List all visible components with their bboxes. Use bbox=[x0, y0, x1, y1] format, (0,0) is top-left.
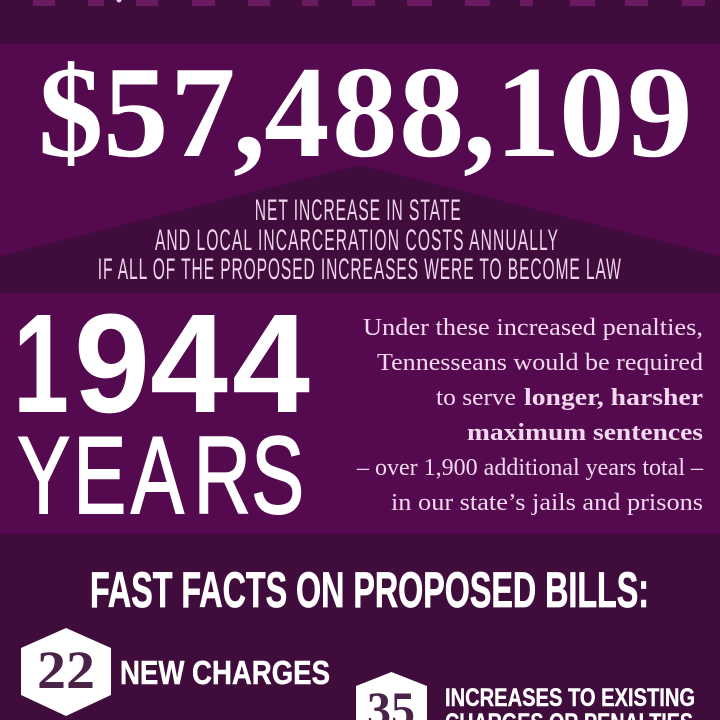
penalties explanation: longer, harsher bbox=[524, 385, 703, 411]
penalties explanation: – over 1,900 additional years total – bbox=[356, 455, 704, 481]
years label: YEARS bbox=[17, 414, 304, 537]
penalties explanation: Tennesseans would be required bbox=[377, 350, 703, 376]
panel: fast facts bbox=[21, 562, 695, 720]
1944 figure: 9 bbox=[74, 284, 150, 442]
hexagon badge 35 bbox=[356, 672, 427, 720]
penalties explanation: to serve bbox=[436, 385, 516, 411]
number 22: 22 bbox=[37, 640, 95, 700]
penalties explanation: in our state’s jails and prisons bbox=[391, 490, 703, 516]
fact: new charges bbox=[21, 628, 330, 716]
cost description bbox=[98, 194, 621, 287]
panel: additional years bbox=[0, 284, 720, 537]
penalties explanation: maximum sentences bbox=[467, 420, 703, 446]
new charges label: NEW CHARGES bbox=[120, 654, 330, 691]
dollar figure: $57,488,109 bbox=[38, 40, 692, 185]
cost description: IF ALL OF THE PROPOSED INCREASES WERE TO BECOME LAW bbox=[98, 253, 621, 287]
fact: increases bbox=[356, 672, 695, 720]
panel: net cost bbox=[0, 40, 720, 294]
hexagon badge 22 bbox=[21, 628, 111, 716]
cost description: NET INCREASE IN STATE bbox=[255, 194, 461, 228]
triangle backdrop bbox=[0, 165, 720, 293]
1944 figure bbox=[13, 284, 310, 442]
penalties explanation bbox=[356, 315, 704, 516]
years panel background bbox=[0, 294, 720, 534]
1944 figure: 1 bbox=[13, 284, 69, 442]
cost description: AND LOCAL INCARCERATION COSTS ANNUALLY bbox=[155, 224, 558, 258]
penalties explanation: Under these increased penalties, bbox=[363, 315, 703, 341]
cost panel background bbox=[0, 44, 720, 294]
1944 figure: 4 bbox=[150, 284, 228, 442]
cropped top header remnants bbox=[33, 0, 705, 6]
1944 figure: 4 bbox=[232, 284, 310, 442]
